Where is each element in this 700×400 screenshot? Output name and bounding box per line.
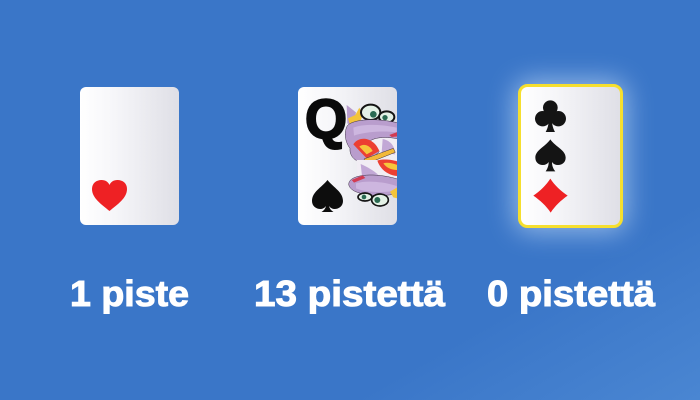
card face (298, 87, 397, 225)
card face with yellow border (520, 86, 622, 226)
lip (390, 132, 397, 137)
fan (353, 139, 379, 158)
icon: spade (535, 139, 566, 171)
robe stripe (382, 139, 395, 154)
sceptre (364, 148, 396, 160)
body (349, 175, 398, 195)
letter Q: Q (305, 87, 347, 150)
icon: club (535, 100, 566, 132)
robe (357, 160, 398, 178)
monster upper part (345, 105, 398, 167)
crown (390, 188, 397, 198)
snout highlight (353, 125, 397, 136)
card: heart, one point (80, 87, 179, 225)
icon: diamond (533, 179, 568, 213)
icon: spade (312, 180, 343, 212)
card: highlighted club, spade and diamond, zero points (514, 80, 627, 232)
label: 0 pistettä: 0 pistettä (487, 273, 656, 314)
crown and ear (346, 105, 356, 124)
lip (352, 175, 365, 183)
white striped robe (371, 138, 397, 160)
glow (514, 80, 627, 232)
card: queen of spades, thirteen points (298, 87, 398, 225)
card face (80, 87, 179, 225)
infographic canvas (72, 64, 700, 400)
eyes (358, 193, 372, 201)
icons: suits (533, 100, 568, 213)
fan (377, 160, 398, 176)
icon: heart (92, 180, 127, 211)
illustration: queen monster (345, 105, 398, 206)
label: 13 pistettä: 13 pistettä (254, 273, 446, 314)
eyes (361, 105, 380, 120)
label: 1 piste: 1 piste (70, 273, 189, 314)
monster lower part (349, 160, 398, 206)
head (345, 120, 398, 164)
